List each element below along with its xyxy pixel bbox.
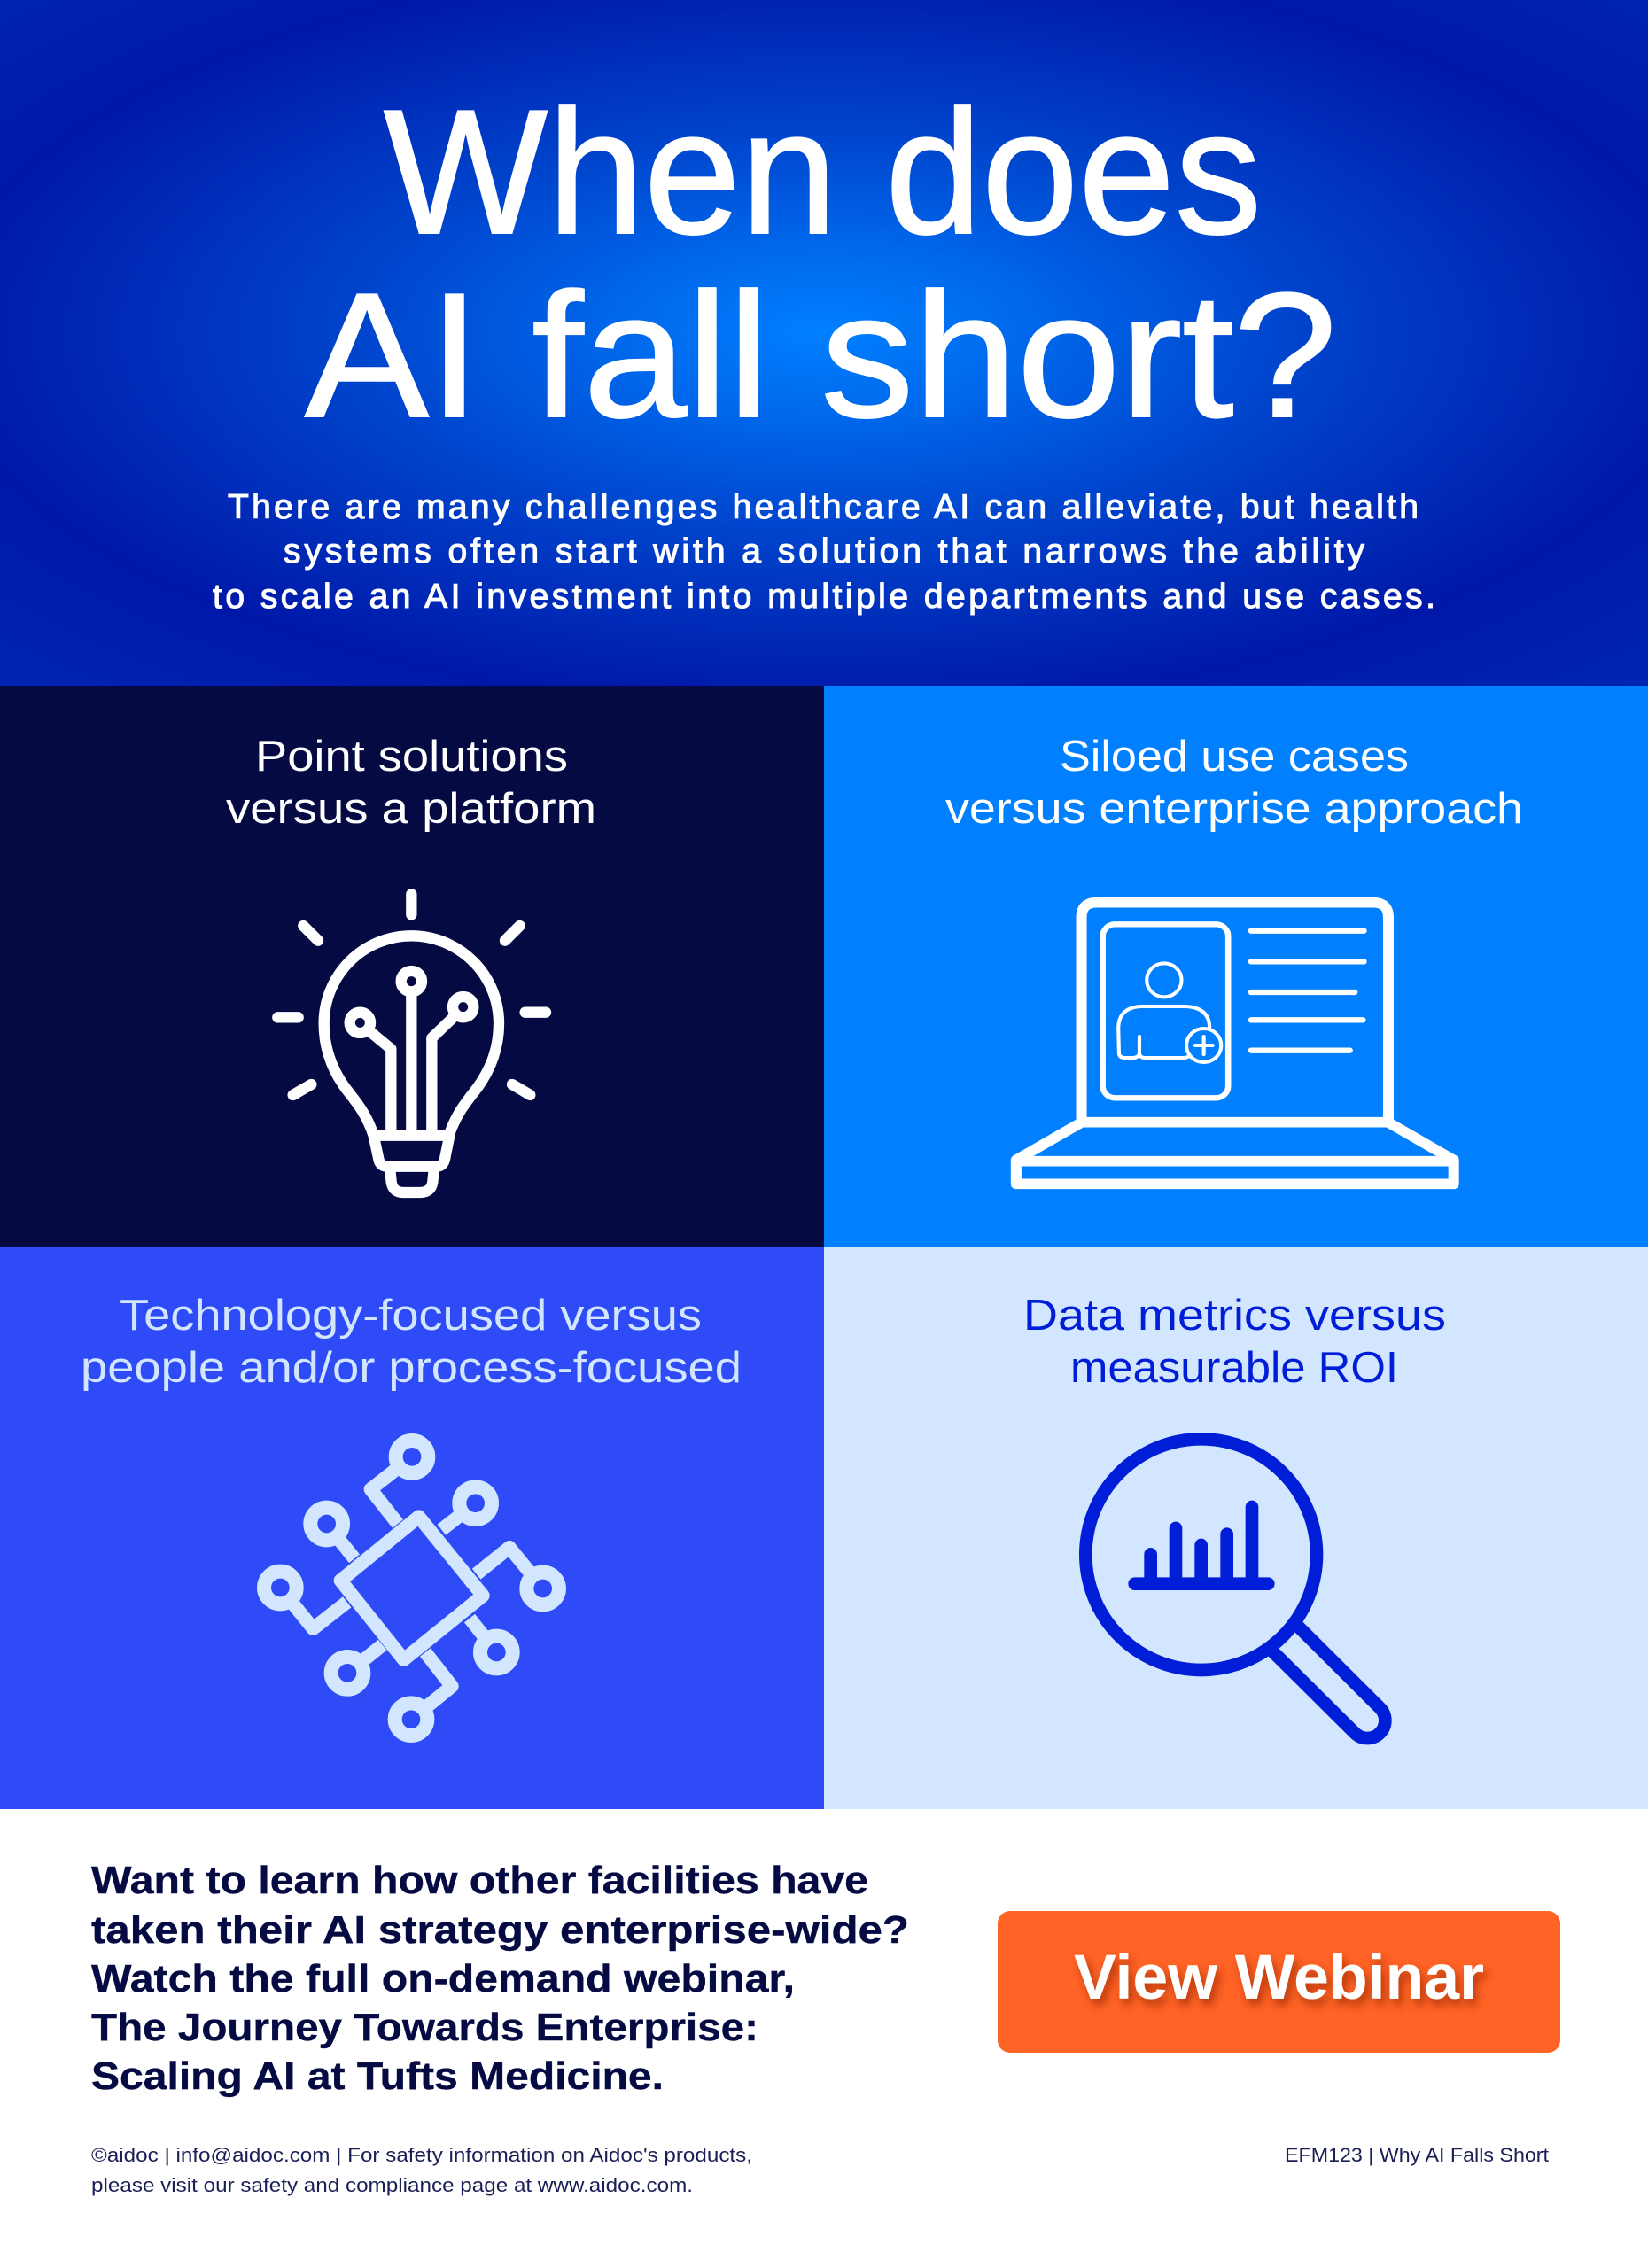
- heading: data metrics: measurable ROI: [1070, 1344, 1398, 1392]
- heading: siloed use cases: versus enterprise approach: [945, 785, 1523, 833]
- heading: technology-focused: [81, 1292, 742, 1392]
- call to action text: The Journey Towards Enterprise:: [91, 2006, 758, 2049]
- title: AI fall short?: [305, 257, 1337, 454]
- heading: point solutions: versus a platform: [226, 785, 596, 833]
- intro text block: systems often start with a solution that narrows the ability: [284, 532, 1364, 571]
- heading: point solutions: [226, 733, 596, 833]
- footer: legal text: [91, 2144, 752, 2196]
- call to action text: taken their AI strategy enterprise-wide?: [91, 1908, 909, 1952]
- intro text block: There are many challenges healthcare AI can alleviate, but health: [228, 488, 1419, 526]
- intro text block: [213, 488, 1435, 616]
- panel: siloed use cases: [824, 686, 1648, 1247]
- call to action text: Want to learn how other facilities have: [91, 1859, 868, 1902]
- panel: data metrics: [824, 1247, 1648, 1809]
- title: When does: [384, 74, 1262, 271]
- footer: legal text: ©aidoc | info@aidoc.com | For safety information on Aidoc's products,: [91, 2144, 752, 2166]
- panel: point solutions: [0, 686, 824, 1247]
- footer: document code: EFM123 | Why AI Falls Short: [1285, 2144, 1549, 2166]
- panel: hero header: [0, 0, 1648, 686]
- icon: magnifying glass with bar chart: [1085, 1439, 1385, 1738]
- call to action text: [91, 1859, 909, 2098]
- heading: siloed use cases: Siloed use cases: [1060, 733, 1409, 781]
- panel: technology-focused: [0, 1247, 824, 1809]
- icon: light bulb with circuit: [277, 894, 546, 1192]
- heading: technology-focused: people and/or process-focused: [81, 1344, 742, 1392]
- icon: circuit chip: [264, 1441, 559, 1736]
- call to action text: Scaling AI at Tufts Medicine.: [91, 2054, 664, 2098]
- footer: legal text: please visit our safety and compliance page at www.aidoc.com.: [91, 2174, 693, 2196]
- icon: laptop with patient record: [1016, 903, 1454, 1184]
- call to action text: Watch the full on-demand webinar,: [91, 1957, 795, 2000]
- heading: technology-focused: Technology-focused versus: [120, 1292, 702, 1340]
- button: view webinar: View Webinar: [1074, 1943, 1484, 2013]
- heading: point solutions: Point solutions: [255, 733, 568, 781]
- intro text block: to scale an AI investment into multiple departments and use cases.: [213, 578, 1435, 616]
- heading: data metrics: Data metrics versus: [1023, 1292, 1446, 1340]
- title: [305, 74, 1337, 454]
- heading: data metrics: [1023, 1292, 1446, 1392]
- heading: siloed use cases: [945, 733, 1523, 833]
- button: view webinar: [998, 1911, 1560, 2053]
